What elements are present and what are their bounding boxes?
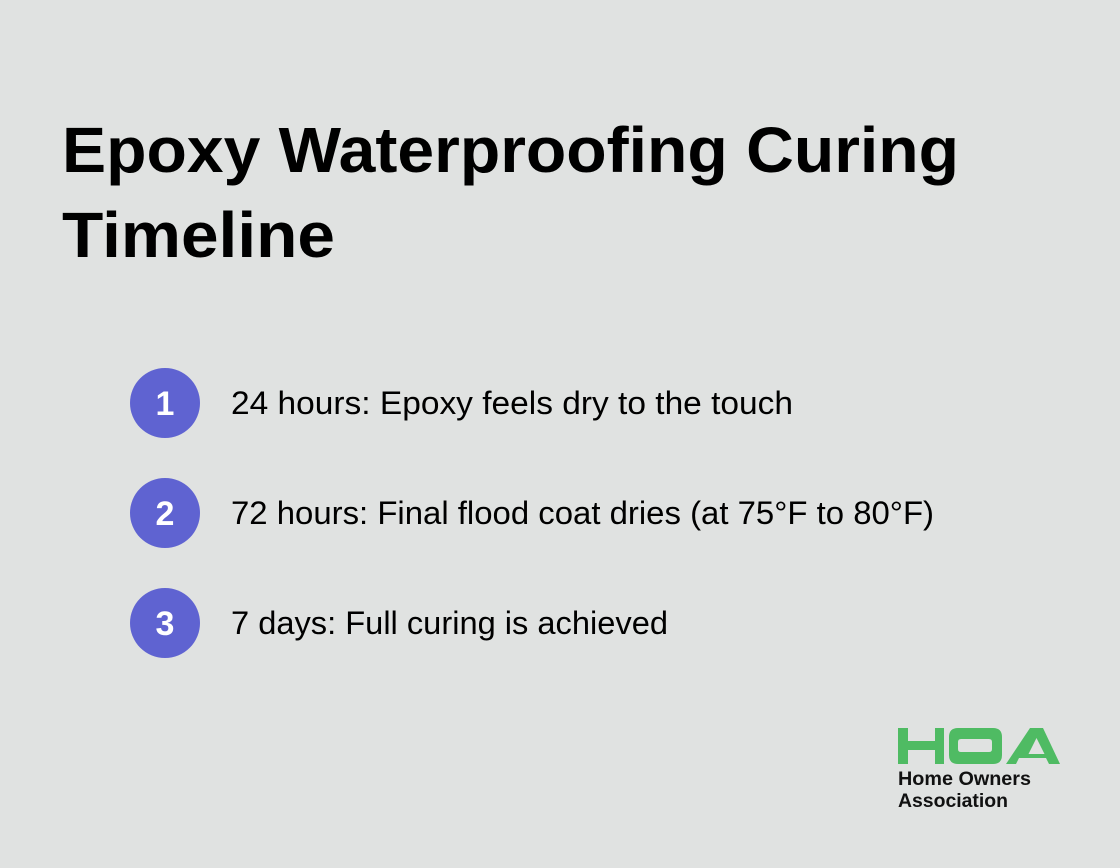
step 2: 72 hours: Final flood coat dries (at 75°F to 80°F) (231, 495, 934, 531)
step 1 (130, 368, 793, 438)
step 1: 24 hours: Epoxy feels dry to the touch (231, 385, 793, 421)
logo: HOA Home Owners Association (898, 728, 1060, 812)
timeline list (130, 368, 934, 658)
logo caption (898, 769, 1031, 812)
step 3 (130, 588, 668, 658)
step 3: 7 days: Full curing is achieved (231, 605, 668, 641)
title: Epoxy Waterproofing Curing (62, 114, 959, 186)
step 2 (130, 478, 934, 548)
title (62, 114, 959, 271)
step 2: 2 (156, 495, 174, 533)
logo wordmark (898, 728, 1060, 764)
logo caption: Association (898, 791, 1008, 812)
step 1: 1 (156, 385, 174, 423)
step 3: 3 (156, 605, 174, 643)
logo caption: Home Owners (898, 769, 1031, 790)
title: Timeline (62, 199, 335, 271)
